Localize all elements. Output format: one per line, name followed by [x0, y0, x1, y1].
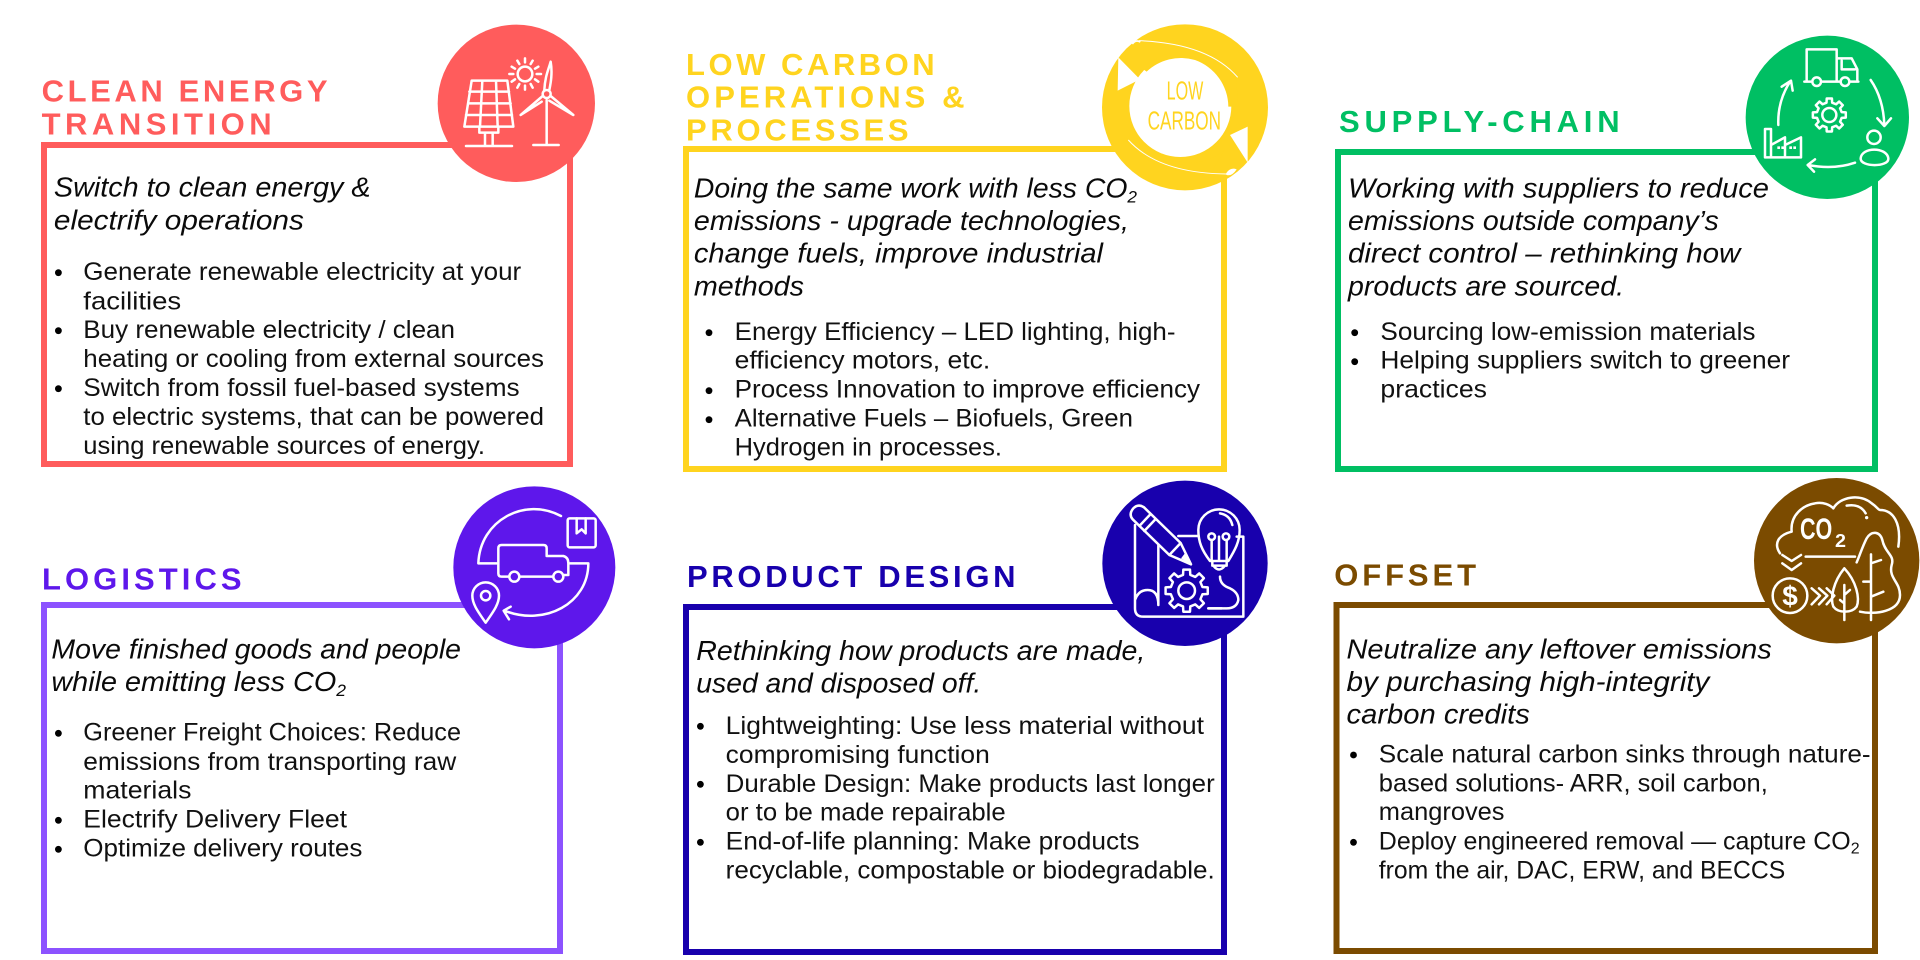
intro text: 2 — [335, 681, 347, 700]
bullet list: Generate renewable electricity at your — [83, 258, 521, 286]
bullet list: Alternative Fuels – Biofuels, Green — [735, 405, 1133, 433]
panel frame — [1338, 152, 1875, 469]
icon: low carbon cycle arrows — [1102, 24, 1268, 190]
intro text: carbon credits — [1346, 699, 1530, 730]
bullet list: Hydrogen in processes. — [735, 434, 1002, 462]
bullet list: based solutions- ARR, soil carbon, — [1379, 769, 1768, 797]
intro text: Rethinking how products are made, — [696, 635, 1145, 666]
panel: supply-chain — [1338, 36, 1909, 469]
intro text: methods — [694, 270, 804, 301]
bullet list: 2 — [1851, 840, 1860, 857]
bullet list: Deploy engineered removal — capture CO — [1379, 827, 1851, 855]
bullet list: Switch from fossil fuel-based systems — [83, 374, 520, 402]
panel: clean energy transition — [42, 25, 595, 464]
icon: delivery truck loop — [453, 486, 615, 648]
bullet list: recyclable, compostable or biodegradable. — [726, 857, 1215, 885]
intro text — [694, 172, 1138, 301]
bullet list: Electrify Delivery Fleet — [83, 806, 347, 834]
intro text: change fuels, improve industrial — [694, 238, 1104, 269]
panel frame — [44, 145, 570, 464]
intro text: products are sourced. — [1347, 270, 1624, 301]
intro text: emissions - upgrade technologies, — [694, 205, 1129, 236]
heading: clean energy transition: CLEAN ENERGY — [42, 74, 328, 109]
bullet list: emissions from transporting raw — [83, 748, 457, 776]
bullet list — [1351, 318, 1790, 404]
bullet list: Optimize delivery routes — [83, 835, 362, 863]
intro text: Working with suppliers to reduce — [1348, 172, 1769, 203]
bullet list — [706, 318, 1201, 462]
bullet list: mangroves — [1379, 798, 1504, 826]
heading: product design: PRODUCT DESIGN — [687, 559, 1016, 594]
intro text: Switch to clean energy & — [54, 172, 371, 203]
panel frame — [686, 607, 1224, 952]
panel frame — [44, 605, 560, 951]
icon: CO2 cloud, coin and trees: CO — [1800, 513, 1832, 546]
heading: low carbon operations and processes — [686, 47, 964, 147]
intro text: direct control – rethinking how — [1348, 238, 1742, 269]
heading: clean energy transition: TRANSITION — [42, 106, 272, 141]
intro text: while emitting less CO — [51, 666, 328, 697]
bullet list — [55, 258, 544, 460]
bullet list: Durable Design: Make products last longer — [726, 770, 1215, 798]
intro text — [54, 172, 371, 235]
icon: CO2 cloud, coin and trees — [1754, 478, 1919, 643]
bullet list: Scale natural carbon sinks through nature- — [1379, 740, 1871, 768]
bullet list: Process Innovation to improve efficiency — [735, 376, 1201, 404]
bullet list: Buy renewable electricity / clean — [83, 316, 455, 344]
panel: product design — [686, 481, 1268, 952]
intro text: Neutralize any leftover emissions — [1346, 633, 1772, 664]
intro text — [1347, 172, 1769, 301]
intro text: electrify operations — [54, 204, 304, 235]
heading: low carbon operations and processes: OPERATIONS & — [686, 80, 964, 115]
icon: low carbon cycle arrows: CARBON — [1148, 105, 1221, 135]
intro text: used and disposed off. — [696, 668, 981, 699]
icon: supply-chain cycle — [1746, 36, 1909, 199]
intro text — [696, 635, 1145, 699]
bullet list — [697, 712, 1215, 885]
bullet list: or to be made repairable — [726, 799, 1006, 827]
bullet list: Helping suppliers switch to greener — [1380, 347, 1790, 375]
heading: logistics: LOGISTICS — [42, 561, 242, 596]
heading: clean energy transition — [42, 74, 328, 141]
panel: low carbon operations and processes — [686, 24, 1268, 469]
bullet list: from the air, DAC, ERW, and BECCS — [1379, 856, 1785, 884]
panel: offset — [1334, 478, 1919, 951]
bullet list: facilities — [83, 287, 181, 315]
icon: CO2 cloud, coin and trees: $ — [1782, 581, 1798, 612]
intro text — [1346, 633, 1772, 730]
intro text: emissions outside company’s — [1348, 205, 1719, 236]
heading: offset: OFFSET — [1334, 557, 1476, 592]
bullet list: compromising function — [726, 741, 990, 769]
heading: supply-chain: SUPPLY-CHAIN — [1339, 104, 1620, 139]
intro text: 2 — [1126, 187, 1138, 206]
heading: low carbon operations and processes: LOW CARBON — [686, 47, 935, 82]
icon: low carbon cycle arrows: LOW — [1167, 75, 1204, 105]
intro text — [51, 633, 461, 700]
bullet list: efficiency motors, etc. — [735, 347, 990, 375]
panel frame — [686, 149, 1224, 469]
intro text: by purchasing high-integrity — [1346, 666, 1712, 697]
icon: design blueprint with pencil, bulb and gear — [1102, 481, 1268, 646]
bullet list: Lightweighting: Use less material without — [726, 712, 1204, 740]
bullet list — [1350, 740, 1871, 884]
intro text: Move finished goods and people — [51, 633, 461, 664]
bullet list: materials — [83, 777, 191, 805]
icon: solar panel, sun and wind turbine — [438, 25, 595, 182]
bullet list: End-of-life planning: Make products — [726, 828, 1140, 856]
bullet list: Energy Efficiency – LED lighting, high- — [735, 318, 1176, 346]
bullet list — [55, 719, 461, 863]
icon: CO2 cloud, coin and trees: 2 — [1835, 530, 1846, 551]
panel: logistics — [42, 486, 615, 951]
bullet list: Sourcing low-emission materials — [1380, 318, 1756, 346]
bullet list: using renewable sources of energy. — [83, 432, 485, 460]
panel frame — [1336, 605, 1875, 951]
bullet list: practices — [1380, 376, 1487, 404]
bullet list: to electric systems, that can be powered — [83, 403, 544, 431]
bullet list: heating or cooling from external sources — [83, 345, 544, 373]
intro text: Doing the same work with less CO — [694, 172, 1122, 203]
heading: low carbon operations and processes: PROCESSES — [686, 112, 909, 147]
bullet list: Greener Freight Choices: Reduce — [83, 719, 461, 747]
